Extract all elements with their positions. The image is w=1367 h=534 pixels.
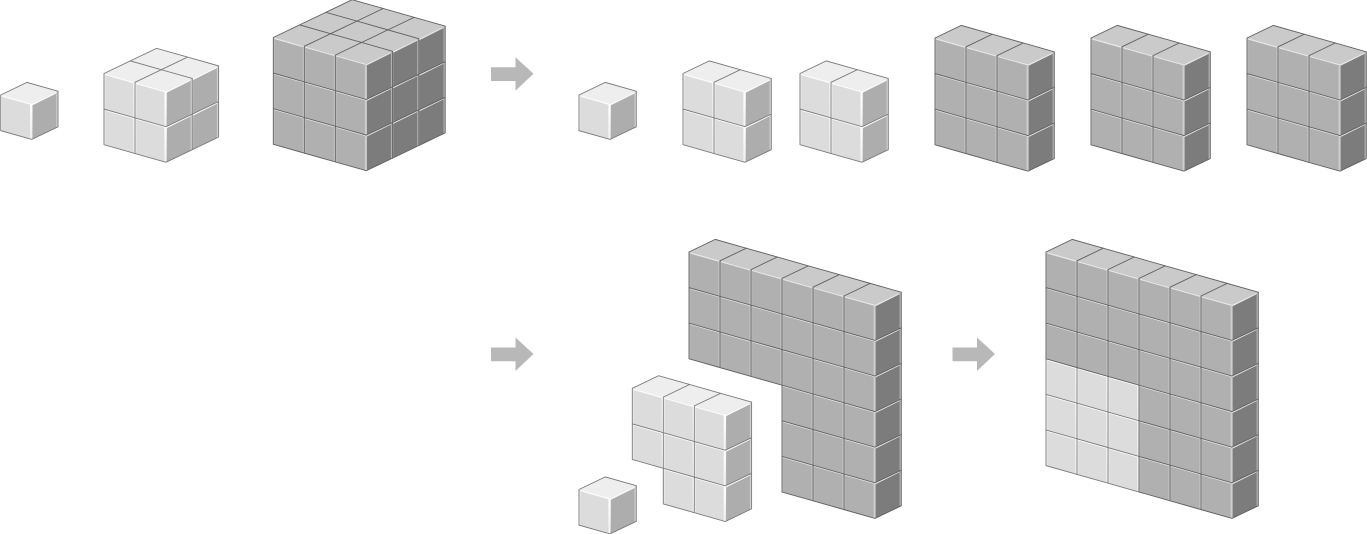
- icon: single light unit cube: [1, 82, 58, 139]
- icon: light 2x2x2 cube: [104, 48, 219, 162]
- icon: dark L-shaped gnomon of 27 cubes: [689, 239, 901, 518]
- icon: dark 3x3 slab two: [1091, 25, 1210, 171]
- arrow: bottom row left: [491, 338, 534, 371]
- icon: dark 3x3 slab one: [935, 25, 1054, 171]
- icon: separated unit cube: [579, 82, 636, 139]
- arrow: bottom row right: [952, 338, 995, 371]
- icon: assembled 6x6 slab with light corner: [1046, 239, 1258, 518]
- icon: dark 3x3x3 cube: [273, 0, 445, 171]
- arrow: top row: [491, 57, 534, 91]
- icon: light gnomon of 8 cubes: [632, 376, 752, 522]
- icon: light 2x2 slab two: [800, 61, 888, 162]
- icon: light 2x2 slab one: [683, 61, 771, 162]
- icon: unit cube below gnomon: [579, 477, 636, 534]
- icon: dark 3x3 slab three: [1247, 25, 1366, 171]
